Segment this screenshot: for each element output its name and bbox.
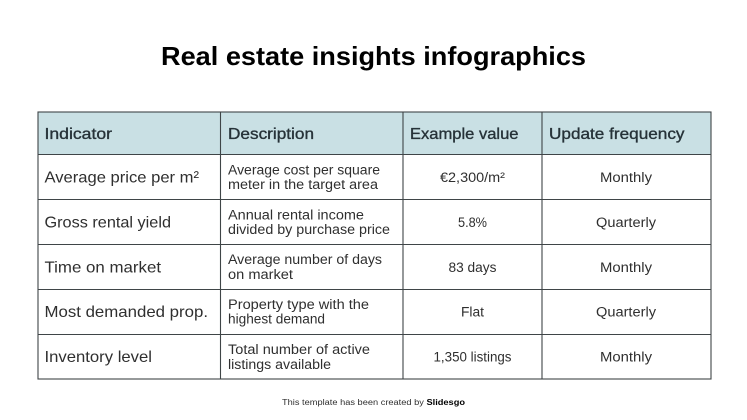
row: time on market: Time on market <box>44 260 162 276</box>
row: most demanded property: Flat <box>461 304 484 320</box>
row: gross rental yield: divided by purchase price <box>228 222 390 237</box>
row: time on market: on market <box>228 267 293 282</box>
row: inventory level: Inventory level <box>44 349 152 366</box>
row: gross rental yield <box>44 208 656 237</box>
header row background <box>38 112 711 154</box>
row: most demanded property: Quarterly <box>596 304 656 320</box>
row: gross rental yield: Annual rental income <box>228 208 364 222</box>
row: average price: Monthly <box>600 170 652 185</box>
row: average price: Average price per m² <box>44 170 200 186</box>
header row <box>44 126 684 143</box>
row: average price: meter in the target area <box>228 177 379 192</box>
footer credit: This template has been created by Slidesgo <box>282 398 465 407</box>
title: Real estate insights infographics <box>161 41 586 71</box>
row: gross rental yield: Quarterly <box>596 215 656 230</box>
row: most demanded property: Most demanded prop. <box>44 304 208 321</box>
header row: Update frequency <box>549 126 684 143</box>
table <box>38 112 711 379</box>
row: time on market <box>44 252 652 282</box>
row: gross rental yield: 5.8% <box>458 215 487 230</box>
row: time on market: Average number of days <box>228 252 382 267</box>
row: inventory level: Monthly <box>600 350 652 364</box>
row: most demanded property: highest demand <box>228 312 325 326</box>
row: inventory level: 1,350 listings <box>434 350 512 364</box>
header row: Description <box>228 126 314 143</box>
row: most demanded property <box>44 297 656 326</box>
header row: Indicator <box>44 126 113 143</box>
row: time on market: 83 days <box>448 260 497 275</box>
row: average price: €2,300/m² <box>440 170 506 185</box>
row: inventory level: Total number of active <box>228 342 370 357</box>
row: average price <box>44 162 652 192</box>
row: inventory level <box>44 342 652 372</box>
row: time on market: Monthly <box>600 260 652 275</box>
header row: Example value <box>410 126 519 143</box>
row: inventory level: listings available <box>228 357 331 372</box>
row: average price: Average cost per square <box>228 162 380 178</box>
row: most demanded property: Property type with the <box>228 297 369 312</box>
row: gross rental yield: Gross rental yield <box>44 214 171 232</box>
